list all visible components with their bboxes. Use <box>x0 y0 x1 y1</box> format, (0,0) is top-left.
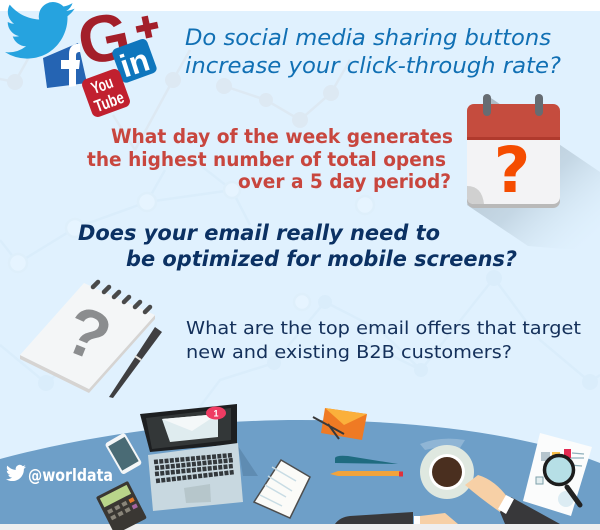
heading: mobile optimization question: be optimized for mobile screens? <box>126 247 517 271</box>
icon: calendar <box>467 94 600 252</box>
heading: sharing buttons question: Do social media sharing buttons <box>185 26 551 51</box>
icon: teal pen <box>335 456 398 464</box>
footer strip <box>0 524 600 530</box>
heading: sharing buttons question: increase your click-through rate? <box>185 54 561 79</box>
illustration: hands and suit <box>335 475 560 524</box>
text block: top email offers question: new and existing B2B customers? <box>186 342 512 363</box>
heading: mobile optimization question: Does your email really need to <box>78 221 440 245</box>
heading: day of week question: over a 5 day period? <box>238 170 451 193</box>
icon: coffee cup on saucer <box>420 439 474 499</box>
icon: youtube: Tube <box>92 88 127 116</box>
icon: calculator <box>96 481 147 530</box>
icon: report with magnifying glass <box>523 433 592 516</box>
icon: notepad with question mark: ? <box>54 291 121 377</box>
text block: top email offers question: What are the top email offers that target <box>186 318 581 339</box>
icon: pencil <box>330 471 403 476</box>
icon: youtube: You <box>89 73 116 98</box>
icon: youtube <box>80 67 132 119</box>
icon: facebook <box>43 43 87 88</box>
twitter handle: @worldata <box>28 466 113 486</box>
icon: laptop with email: 1 <box>213 408 219 418</box>
icon: laptop with email <box>140 404 258 511</box>
icon: calendar: ? <box>494 134 530 207</box>
icon: orange envelope and glasses <box>313 408 367 440</box>
icon: smartphone <box>104 432 142 475</box>
icon: linkedin: in <box>116 41 154 84</box>
panel: blue desk <box>0 420 600 524</box>
heading: day of week question: the highest number of total opens <box>87 148 446 171</box>
icon: checklist notepad <box>254 460 310 518</box>
heading: day of week question: What day of the week generates <box>111 125 453 148</box>
icon: pen <box>109 327 162 398</box>
twitter handle <box>6 465 113 486</box>
icon: notepad with question mark <box>20 282 155 393</box>
icon: twitter bird <box>5 2 75 59</box>
